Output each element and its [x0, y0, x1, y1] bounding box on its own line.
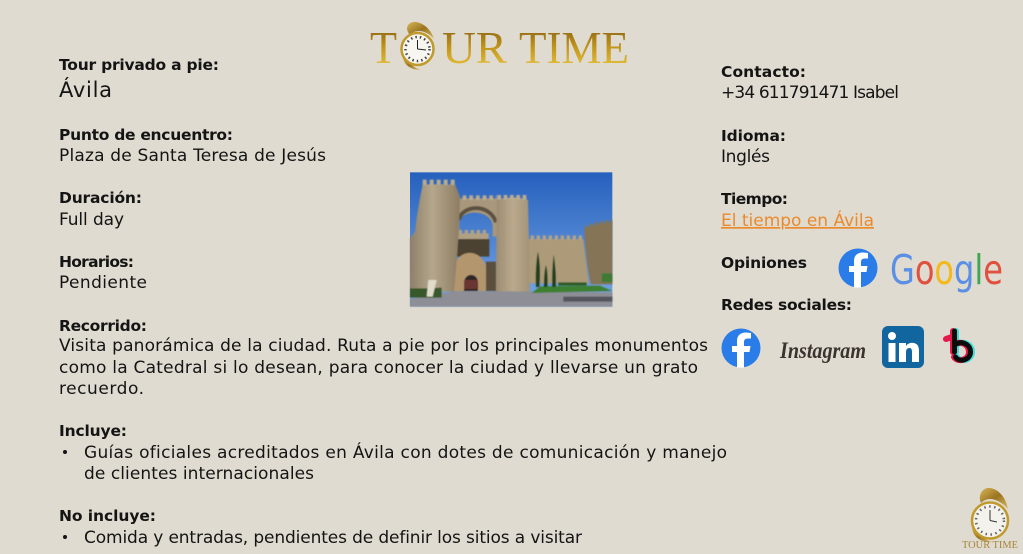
icon: pocket watch	[402, 22, 434, 70]
panel: tour details	[59, 56, 727, 548]
middle tower	[496, 197, 530, 292]
link: weather: El tiempo en Ávila	[721, 209, 874, 231]
heading: duración: Duración:	[59, 189, 142, 207]
left tower	[410, 184, 460, 292]
heading: recorrido: Recorrido:	[59, 317, 147, 335]
heading: contacto: Contacto:	[721, 63, 806, 81]
icon: small pocket watch	[972, 488, 1008, 542]
logo: Tour Time	[370, 22, 629, 73]
upper arch	[457, 198, 497, 237]
heading: opiniones: Opiniones	[721, 254, 807, 272]
text: language: Inglés	[721, 147, 770, 167]
icon: Instagram wordmark: Instagram	[779, 338, 866, 363]
ground	[410, 291, 612, 307]
text: route description	[59, 336, 708, 399]
cypresses	[536, 252, 540, 287]
icon: TikTok	[946, 331, 972, 360]
heading: redes sociales: Redes sociales:	[721, 296, 852, 314]
heading: tiempo: Tiempo:	[721, 190, 788, 208]
text: meeting point: Plaza de Santa Teresa de Jesús	[59, 146, 326, 166]
icon: Facebook opinions	[838, 248, 878, 288]
text: schedule: Pendiente	[59, 273, 147, 293]
list: included: de clientes internacionales	[84, 464, 314, 484]
icon: LinkedIn	[882, 326, 924, 368]
heading: punto de encuentro: Punto de encuentro:	[59, 126, 233, 144]
logo: Tour Time: T	[370, 22, 397, 73]
text: small logo wordmark: TOUR TIME	[962, 540, 1018, 551]
right wall	[528, 239, 589, 283]
logo: Tour Time: UR	[442, 22, 507, 73]
text: duration: Full day	[59, 210, 124, 230]
text: city: Ávila	[59, 77, 112, 102]
text: phone: +34 611791471 Isabel	[721, 83, 899, 103]
panel: contact info	[721, 63, 899, 314]
heading: horarios: Horarios:	[59, 253, 134, 271]
list: included: Guías oficiales acreditados en Ávila con dotes de comunicación y manejo	[84, 441, 727, 463]
list: not included: Comida y entradas, pendientes de definir los sitios a visitar	[84, 528, 582, 548]
heading: idioma: Idioma:	[721, 127, 786, 145]
photo: walls of Ávila	[410, 172, 612, 307]
icon: Google wordmark: Google	[890, 246, 1003, 294]
lower gate	[453, 253, 487, 291]
list: included	[63, 441, 727, 484]
icon: Facebook social	[722, 328, 760, 368]
logo: small Tour Time	[962, 488, 1018, 551]
logo: Tour Time: TIME	[519, 22, 629, 73]
text: route description: Visita panorámica de la ciudad. Ruta a pie por los principales monumentos	[59, 336, 708, 356]
far right tower	[584, 222, 612, 284]
heading: no incluye: No incluye:	[59, 507, 156, 525]
heading: tour privado a pie: Tour privado a pie:	[59, 56, 219, 74]
text: route description: recuerdo.	[59, 379, 144, 399]
text: route description: como la Catedral si lo desean, para conocer la ciudad y llevarse un grato	[59, 358, 698, 378]
inner wall behind the arch	[458, 233, 489, 240]
heading: incluye: Incluye:	[59, 422, 127, 440]
